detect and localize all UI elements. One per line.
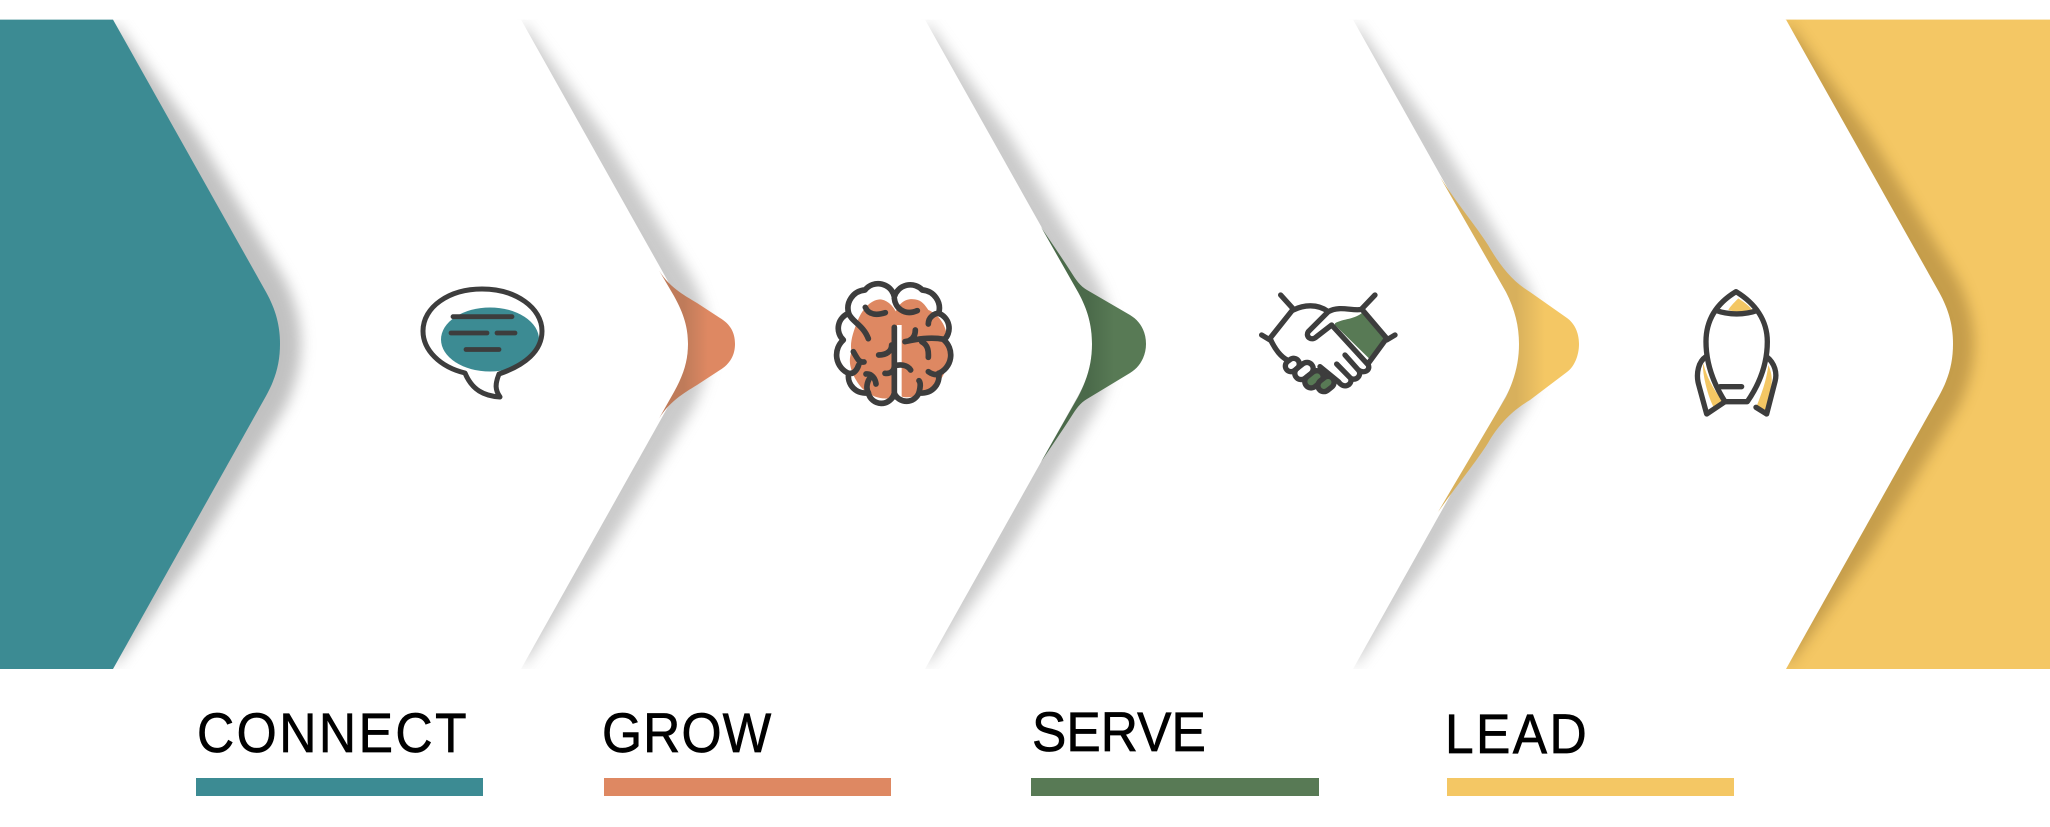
curl: lead yellow [1438, 177, 1579, 512]
icon: rocket [1697, 292, 1776, 414]
chevron 1 shadow [113, 20, 301, 669]
icon: handshake [1262, 295, 1395, 394]
label: CONNECT: CONNECT [197, 702, 467, 764]
label: SERVE: SERVE [1032, 701, 1206, 763]
panel: connect teal chevron [0, 20, 280, 669]
chevron 4 white [1230, 20, 1520, 669]
bar: SERVE [1031, 778, 1319, 796]
chevron shadow on yellow block [1786, 20, 1974, 669]
label: GROW: GROW [602, 702, 771, 764]
icon: brain [837, 284, 951, 403]
chevron 3 white [802, 20, 1092, 669]
bar: GROW [604, 778, 891, 796]
bar: LEAD [1447, 778, 1734, 796]
curl: serve green [1041, 227, 1146, 462]
bar: CONNECT [196, 778, 483, 796]
chevron 3 shadow [925, 20, 1113, 669]
curl: grow orange [657, 267, 735, 422]
chevron 4 shadow [1353, 20, 1541, 669]
chevron 5 white [1663, 20, 1953, 669]
label: LEAD: LEAD [1445, 703, 1587, 765]
chevron 2 white [398, 20, 688, 669]
chevron 2 shadow [521, 20, 709, 669]
icon: speech bubble [423, 289, 542, 397]
panel: lead yellow end block [1785, 20, 2050, 669]
